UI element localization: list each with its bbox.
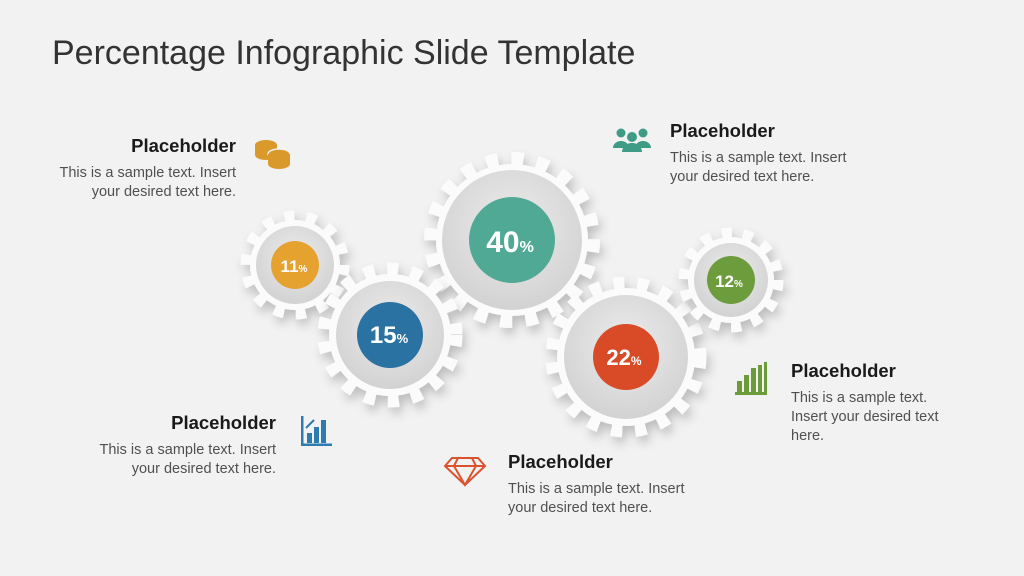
- gear: 12%: [684, 233, 778, 327]
- icon: diamond: [445, 458, 485, 485]
- gear: 40%: [431, 159, 593, 321]
- icon: coins: [255, 140, 290, 169]
- icon: people: [613, 128, 651, 152]
- gear: 11%: [246, 216, 344, 314]
- text block: bottom left: This is a sample text. Insert: [100, 442, 276, 458]
- text block: right: Placeholder: [791, 360, 896, 381]
- text block: top right: [670, 120, 846, 185]
- text block: top left: Placeholder: [131, 135, 236, 156]
- text block: bottom center: your desired text here.: [508, 500, 652, 516]
- text block: top right: This is a sample text. Insert: [670, 150, 846, 166]
- icon: bar chart green: [735, 362, 767, 395]
- text block: bottom left: [100, 412, 276, 477]
- gear: 40%: 40%: [486, 226, 534, 259]
- gear: 11%: 11%: [281, 257, 308, 276]
- icon: bar chart blue: [301, 416, 332, 446]
- text block: top left: your desired text here.: [92, 184, 236, 200]
- text block: top left: [60, 135, 236, 200]
- text block: bottom center: Placeholder: [508, 451, 613, 472]
- text block: bottom left: Placeholder: [171, 412, 276, 433]
- text block: bottom center: This is a sample text. Insert: [508, 481, 684, 497]
- gear: 22%: 22%: [606, 345, 642, 370]
- text block: bottom center: [508, 451, 684, 516]
- text block: right: [791, 360, 938, 444]
- text block: top right: Placeholder: [670, 120, 775, 141]
- text block: top left: This is a sample text. Insert: [60, 165, 236, 181]
- gear: 22%: [552, 283, 700, 431]
- text block: bottom left: your desired text here.: [132, 461, 276, 477]
- gear: 15%: 15%: [370, 322, 409, 349]
- text block: right: here.: [791, 428, 824, 444]
- text block: right: Insert your desired text: [791, 409, 938, 425]
- text block: top right: your desired text here.: [670, 169, 814, 185]
- gear: 12%: 12%: [715, 272, 743, 291]
- gear: 15%: [324, 269, 456, 401]
- title: Percentage Infographic Slide Template: [52, 34, 635, 72]
- text block: right: This is a sample text.: [791, 390, 927, 406]
